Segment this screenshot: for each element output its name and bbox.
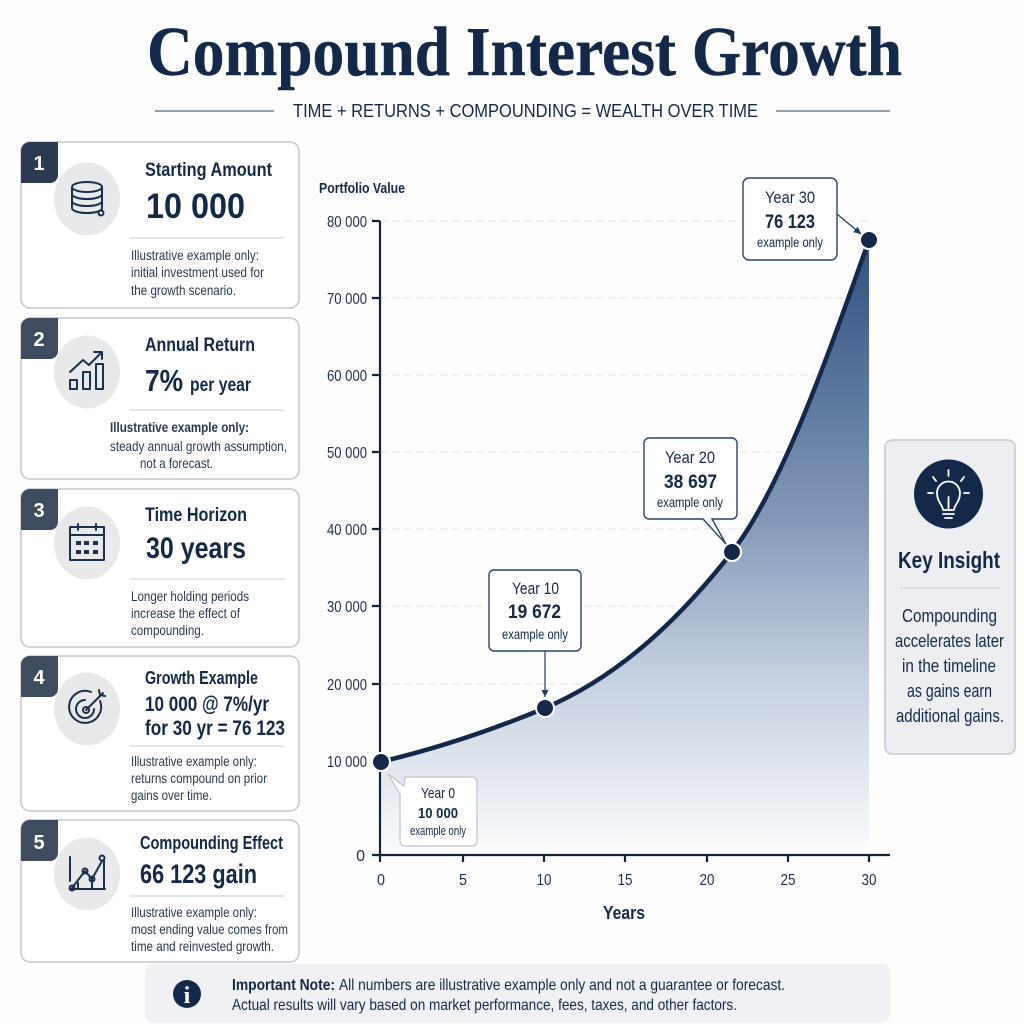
value: 10 000 @ 7%/yr [145, 693, 269, 716]
value: 66 123 gain [140, 859, 257, 889]
value [145, 693, 285, 740]
x axis title: Years [603, 903, 645, 923]
description [131, 588, 249, 638]
value [145, 363, 251, 398]
note text: All numbers are illustrative example only and not a guarantee or forecast. [339, 977, 785, 994]
icon: info: i [184, 983, 191, 1009]
value: 10 000 [146, 187, 245, 226]
panel: starting amount [21, 142, 299, 308]
insight text: in the timeline [902, 656, 996, 676]
value: per year [190, 375, 251, 396]
y axis title: Portfolio Value [319, 180, 405, 197]
heading: Growth Example [145, 668, 258, 688]
callout: year 30 [743, 178, 861, 260]
badge 1 [21, 142, 58, 183]
insight text: Compounding [902, 606, 997, 626]
description: Illustrative example only: [131, 753, 257, 769]
area under curve [380, 240, 869, 855]
badge 4 [21, 656, 58, 697]
x axis labels: 15 [618, 872, 633, 889]
panel: time horizon [21, 489, 299, 647]
description: initial investment used for [131, 264, 264, 280]
badge 3: 3 [33, 500, 45, 522]
description: compounding. [131, 622, 204, 638]
icon: info [173, 980, 201, 1009]
value: 30 years [146, 532, 246, 565]
callout: year 10: example only [502, 626, 568, 642]
description: most ending value comes from [131, 921, 288, 937]
insight text: additional gains. [896, 706, 1004, 726]
description [131, 753, 267, 803]
callout: year 20: 38 697 [664, 472, 717, 493]
icon: rising bars [54, 336, 120, 408]
y axis labels: 30 000 [327, 599, 367, 616]
description [110, 419, 287, 471]
badge 5: 5 [33, 832, 45, 854]
value: 7% [145, 363, 183, 398]
x axis labels: 20 [700, 872, 715, 889]
badge 2: 2 [33, 329, 45, 351]
y axis labels: 0 [356, 848, 365, 865]
description: time and reinvested growth. [131, 938, 274, 954]
panel: growth example [21, 656, 299, 811]
description: Illustrative example only: [131, 247, 259, 263]
y axis labels: 40 000 [327, 522, 367, 539]
y axis labels: 60 000 [327, 368, 367, 385]
icon: line chart [54, 838, 120, 910]
panel: important note [145, 964, 890, 1023]
badge 2 [21, 318, 58, 359]
callout: year 10: Year 10 [512, 579, 559, 598]
description [131, 904, 288, 954]
badge 1: 1 [33, 153, 45, 175]
x axis labels [377, 872, 877, 889]
chart: portfolio value over years [319, 178, 890, 923]
heading: Compounding Effect [140, 833, 283, 853]
heading: Annual Return [145, 335, 255, 356]
x axis labels: 30 [862, 872, 877, 889]
panel: annual return [21, 318, 299, 479]
description: increase the effect of [131, 605, 240, 621]
description: the growth scenario. [131, 282, 236, 298]
note text [232, 977, 785, 1014]
description: returns compound on prior [131, 770, 267, 786]
insight text: as gains earn [907, 681, 992, 701]
callout: year 10 [489, 570, 581, 697]
heading: Key Insight [898, 547, 1000, 573]
callout: year 30: example only [757, 234, 823, 250]
insight text: accelerates later [895, 631, 1004, 651]
y axis labels: 80 000 [327, 214, 367, 231]
y axis labels: 20 000 [327, 677, 367, 694]
y axis labels: 70 000 [327, 291, 367, 308]
callout: year 30: Year 30 [765, 188, 815, 207]
callout: year 0: 10 000 [418, 805, 458, 822]
icon: coin stack [54, 162, 120, 236]
description: gains over time. [131, 787, 212, 803]
callout: year 20 [644, 438, 737, 544]
icon: light bulb [914, 460, 983, 528]
description: Illustrative example only: [110, 419, 249, 435]
y axis labels: 10 000 [327, 754, 367, 771]
callout: year 30: 76 123 [765, 212, 815, 233]
panel: key insight [885, 440, 1015, 754]
subtitle: TIME + RETURNS + COMPOUNDING = WEALTH OVER TIME [293, 101, 758, 121]
callout: year 0: Year 0 [421, 785, 455, 802]
description: not a forecast. [140, 455, 213, 471]
badge 4: 4 [33, 667, 45, 689]
icon: target [54, 672, 120, 746]
y axis labels [327, 214, 367, 865]
callout: year 20: Year 20 [665, 448, 715, 467]
description [131, 247, 264, 298]
callout: year 20: example only [657, 494, 723, 510]
note text: Important Note: [232, 977, 335, 994]
title: Compound Interest Growth [147, 14, 902, 91]
note text: Actual results will vary based on market performance, fees, taxes, and other factors. [232, 997, 737, 1014]
panel: compounding effect [21, 820, 299, 962]
description: steady annual growth assumption, [110, 438, 287, 454]
y axis labels: 50 000 [327, 445, 367, 462]
heading: Time Horizon [145, 505, 247, 526]
x axis labels: 5 [459, 872, 467, 889]
x axis labels: 0 [377, 872, 385, 889]
growth curve [380, 240, 869, 762]
data points [372, 231, 878, 771]
heading: Starting Amount [145, 160, 273, 181]
icon: calendar [54, 506, 120, 580]
x axis labels: 10 [536, 872, 552, 889]
value: for 30 yr = 76 123 [145, 717, 285, 740]
description: Longer holding periods [131, 588, 249, 604]
insight text [895, 606, 1004, 726]
x axis labels: 25 [780, 872, 796, 889]
description: Illustrative example only: [131, 904, 257, 920]
callout: year 10: 19 672 [508, 602, 561, 623]
badge 5 [21, 820, 58, 861]
callout: year 0 [388, 774, 477, 846]
badge 3 [21, 489, 58, 530]
callout: year 0: example only [410, 823, 466, 838]
